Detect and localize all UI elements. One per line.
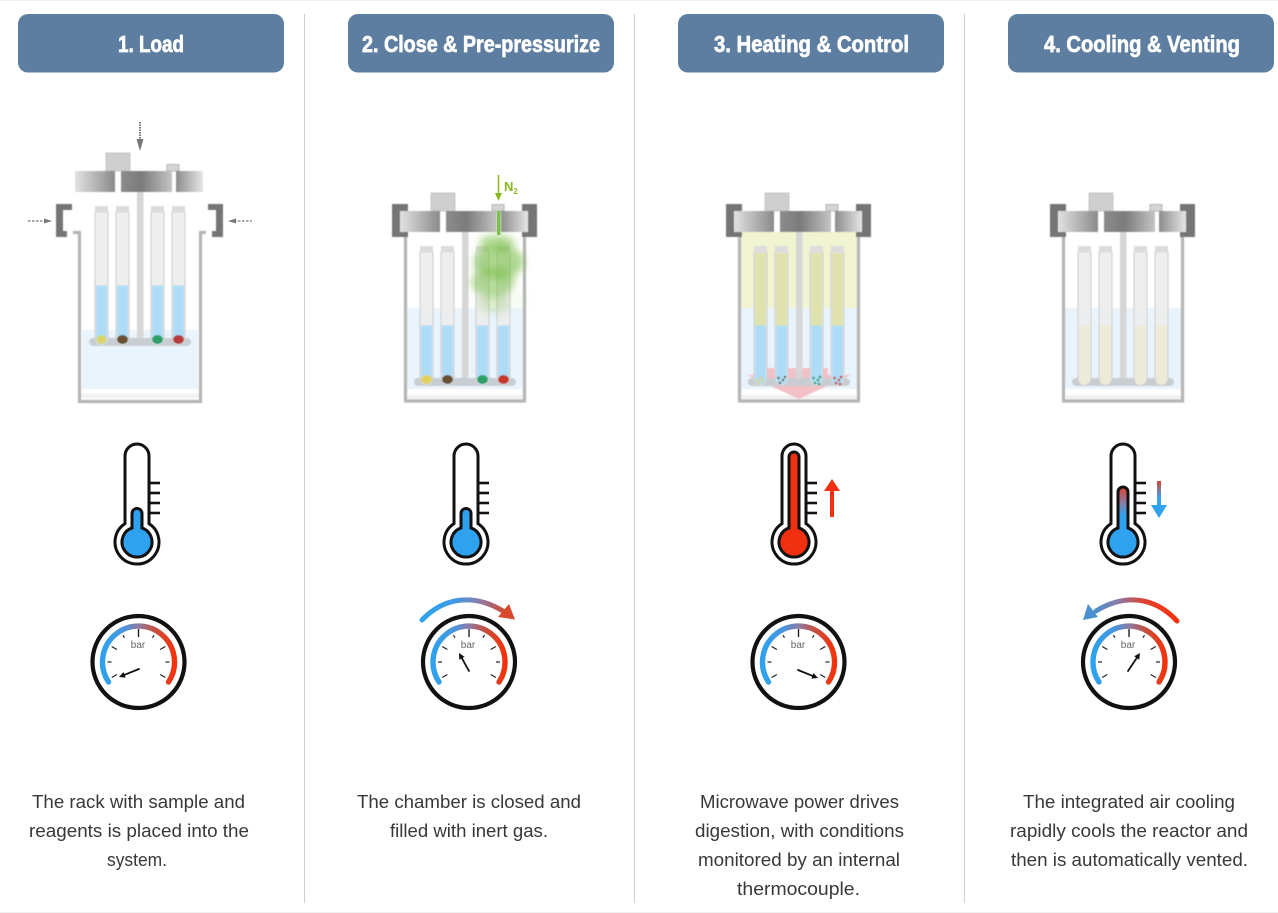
description text: monitored by an internal bbox=[698, 849, 900, 870]
panel: step 4 cooling and venting bbox=[1008, 14, 1274, 870]
gauge: high pressure bbox=[752, 616, 844, 708]
arrow and label: N2 inlet bbox=[495, 175, 518, 201]
arrow: lid moves down bbox=[136, 122, 144, 151]
icon: hot thermometer bbox=[772, 444, 817, 564]
description text bbox=[29, 791, 249, 870]
description text bbox=[695, 791, 904, 899]
panel: step 3 heating and control bbox=[678, 14, 944, 899]
heading: 1. Load: 1. Load bbox=[118, 31, 184, 57]
arrow: temperature down bbox=[1151, 481, 1167, 518]
reactor diagram: microwave heating bbox=[726, 193, 871, 401]
arrow and label: N2 inlet: N bbox=[504, 179, 513, 194]
heading: 1. Load bbox=[18, 14, 284, 72]
description text: then is automatically vented. bbox=[1011, 849, 1248, 870]
gauge: low pressure bbox=[92, 616, 184, 708]
heading: 2. Close & Pre-pressurize: 2. Close & Pre-pressurize bbox=[362, 31, 600, 57]
description text: filled with inert gas. bbox=[390, 820, 548, 841]
description text: reagents is placed into the bbox=[29, 820, 249, 841]
heading: 3. Heating & Control bbox=[678, 14, 944, 72]
description text: thermocouple. bbox=[737, 878, 860, 899]
icon: pressure rising arrow bbox=[422, 600, 515, 620]
heading: 4. Cooling & Venting bbox=[1008, 14, 1274, 72]
reactor diagram: closed chamber with nitrogen bbox=[392, 193, 537, 401]
description text: The rack with sample and bbox=[32, 791, 245, 812]
arrow: right clamp moves in bbox=[228, 218, 252, 224]
description text: system. bbox=[107, 849, 167, 870]
reactor diagram: cooled digested samples bbox=[1050, 193, 1195, 401]
icon: cold thermometer bbox=[444, 444, 489, 564]
heading: 3. Heating & Control: 3. Heating & Control bbox=[714, 31, 909, 57]
gauge: pressure falling: bar bbox=[1121, 640, 1136, 651]
description text: The chamber is closed and bbox=[357, 791, 581, 812]
gauge: high pressure: bar bbox=[791, 640, 806, 651]
icon: cold thermometer bbox=[115, 444, 160, 564]
description text: The integrated air cooling bbox=[1023, 791, 1235, 812]
nitrogen gas cloud bbox=[471, 211, 526, 313]
description text bbox=[357, 791, 581, 841]
panel: step 2 close and pre-pressurize bbox=[348, 14, 614, 841]
icon: cooling thermometer bbox=[1101, 444, 1146, 564]
reactor diagram: rack lowered into open chamber bbox=[56, 153, 223, 402]
description text: Microwave power drives bbox=[700, 791, 899, 812]
arrow and label: N2 inlet: 2 bbox=[513, 187, 518, 196]
gauge: pressure falling bbox=[1083, 616, 1175, 708]
panel: step 1 load bbox=[18, 14, 284, 870]
description text: digestion, with conditions bbox=[695, 820, 904, 841]
heading: 2. Close & Pre-pressurize bbox=[348, 14, 614, 72]
heading: 4. Cooling & Venting: 4. Cooling & Venting bbox=[1044, 31, 1240, 57]
arrow: temperature up bbox=[824, 479, 840, 517]
description text: rapidly cools the reactor and bbox=[1010, 820, 1248, 841]
gauge: pressure rising: bar bbox=[461, 640, 476, 651]
arrow: left clamp moves in bbox=[28, 218, 52, 224]
description text bbox=[1010, 791, 1248, 870]
icon: pressure falling arrow bbox=[1083, 600, 1177, 621]
gauge: low pressure: bar bbox=[131, 640, 146, 651]
gauge: pressure rising bbox=[423, 616, 515, 708]
